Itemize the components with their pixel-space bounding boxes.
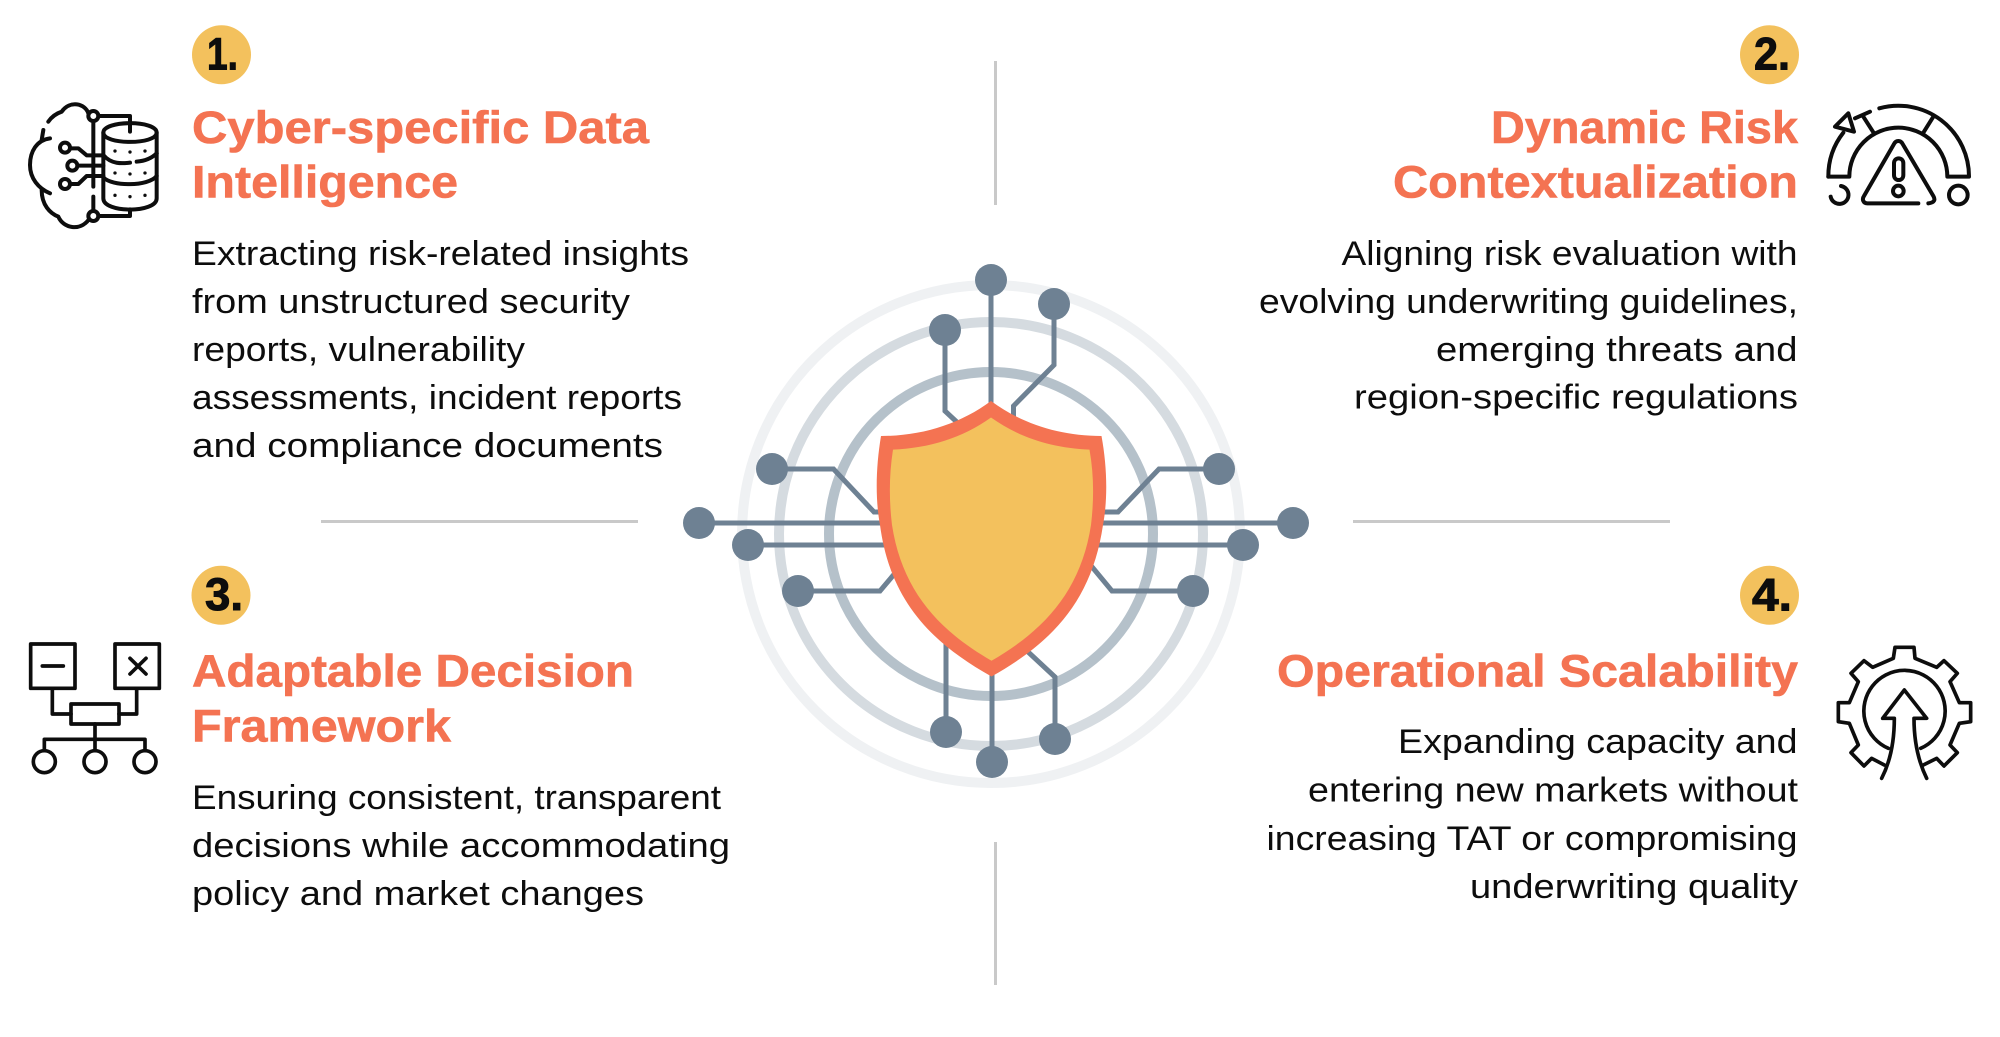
heading 3 xyxy=(192,646,634,752)
body text 1: and compliance documents xyxy=(192,427,663,465)
circuit lines xyxy=(699,280,1293,762)
heading 2: Dynamic Risk xyxy=(1491,102,1799,153)
badge 2 xyxy=(1740,25,1799,84)
body text 4: Expanding capacity and xyxy=(1398,723,1798,761)
heading 2: Contextualization xyxy=(1393,156,1798,208)
shield xyxy=(877,401,1106,676)
icon: risk gauge with warning triangle xyxy=(1828,106,1969,204)
icon: gear with up arrow xyxy=(1838,647,1971,778)
body text 3: decisions while accommodating xyxy=(192,827,730,865)
heading 1 xyxy=(192,102,650,208)
icon: decision tree xyxy=(31,644,159,773)
central shield graphic xyxy=(683,264,1309,783)
heading 1: Intelligence xyxy=(192,156,458,208)
heading 3: Adaptable Decision xyxy=(192,646,634,696)
badge 3: 3. xyxy=(205,569,243,620)
body text 2: emerging threats and xyxy=(1436,331,1798,369)
panel: operational scalability xyxy=(1266,566,1971,906)
body text 4: entering new markets without xyxy=(1308,772,1798,810)
body text 2: evolving underwriting guidelines, xyxy=(1259,283,1798,321)
panel: cyber-specific data intelligence xyxy=(30,25,689,465)
body text 1: Extracting risk-related insights xyxy=(192,235,689,273)
heading 1: Cyber-specific Data xyxy=(192,102,650,153)
body text 4: underwriting quality xyxy=(1470,868,1799,906)
badge 2: 2. xyxy=(1754,28,1790,80)
badge 3 xyxy=(192,566,250,625)
body text 2: Aligning risk evaluation with xyxy=(1342,235,1798,273)
body text 1: from unstructured security xyxy=(192,283,631,321)
body text 2 xyxy=(1259,235,1798,416)
body text 3: policy and market changes xyxy=(192,875,644,913)
icon: brain and database xyxy=(30,104,157,227)
panel: adaptable decision framework xyxy=(31,566,730,913)
heading 3: Framework xyxy=(192,700,452,752)
body text 4: increasing TAT or compromising xyxy=(1266,820,1798,858)
concentric rings xyxy=(742,285,1240,783)
circuit nodes xyxy=(683,264,1309,778)
body text 4 xyxy=(1266,723,1799,906)
badge 4 xyxy=(1740,566,1799,625)
heading 2 xyxy=(1393,102,1799,208)
body text 2: region-specific regulations xyxy=(1354,378,1798,416)
body text 1 xyxy=(192,235,689,465)
body text 3: Ensuring consistent, transparent xyxy=(192,779,721,817)
heading 4: Operational Scalability xyxy=(1277,646,1798,696)
body text 3 xyxy=(192,779,730,913)
badge 4: 4. xyxy=(1752,570,1792,620)
body text 1: reports, vulnerability xyxy=(192,331,526,369)
badge 1: 1. xyxy=(207,28,238,80)
body text 1: assessments, incident reports xyxy=(192,379,682,417)
panel: dynamic risk contextualization xyxy=(1259,25,1969,416)
badge 1 xyxy=(192,25,251,84)
